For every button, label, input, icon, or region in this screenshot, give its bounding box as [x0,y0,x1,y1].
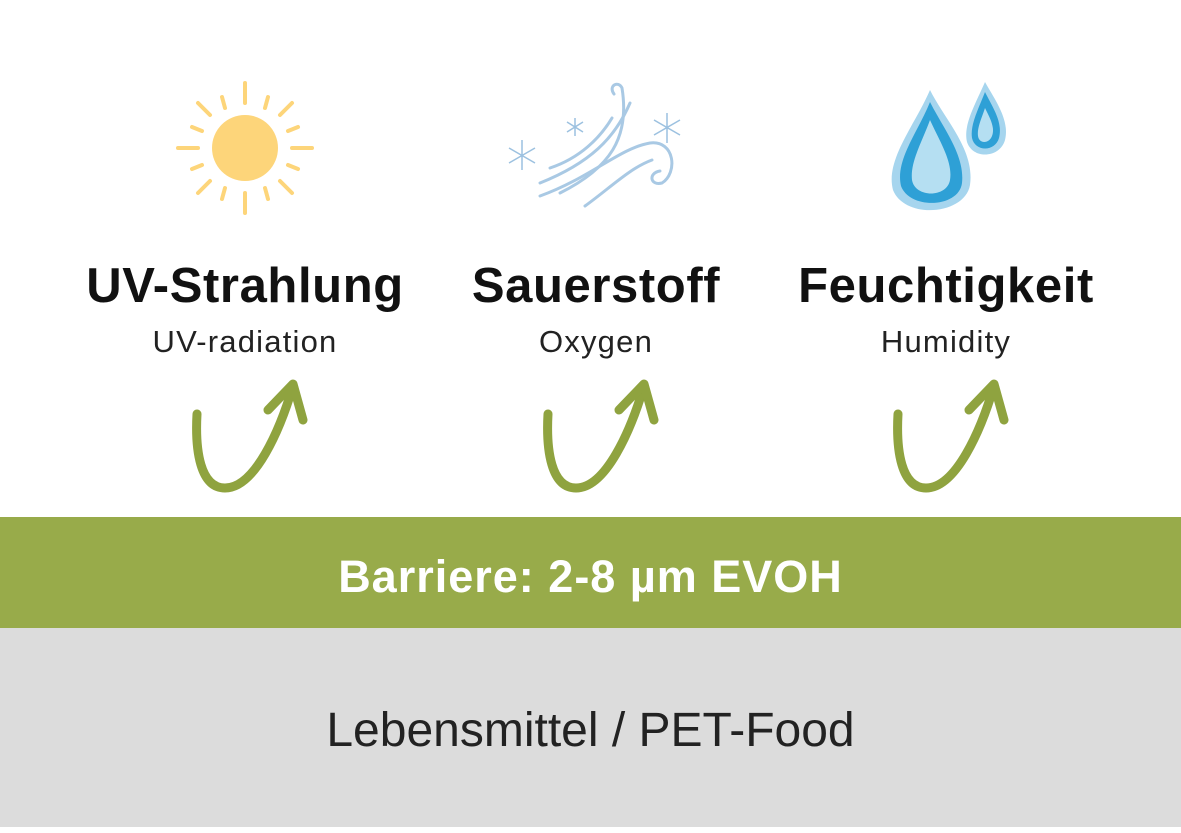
arrow 3 [898,384,1004,488]
icon: wind [508,82,680,208]
gray food band [0,628,1181,827]
heading: UV-Strahlung: UV-Strahlung [86,259,404,313]
icon: water drops [892,82,1006,210]
subtitle: Humidity: Humidity [881,324,1011,359]
heading: Sauerstoff: Sauerstoff [472,259,720,313]
subtitle: Oxygen: Oxygen [539,324,653,359]
heading: Feuchtigkeit: Feuchtigkeit [798,259,1094,313]
arrow 2 [548,384,654,488]
green barrier band [0,517,1181,628]
icon: sun [176,81,314,215]
arrow 1 [197,384,303,488]
arrows [192,380,1008,492]
gray food band: Lebensmittel / PET-Food [326,704,855,757]
subtitle: UV-radiation: UV-radiation [152,324,338,359]
green barrier band: Barriere: 2-8 µm EVOH [338,551,843,602]
